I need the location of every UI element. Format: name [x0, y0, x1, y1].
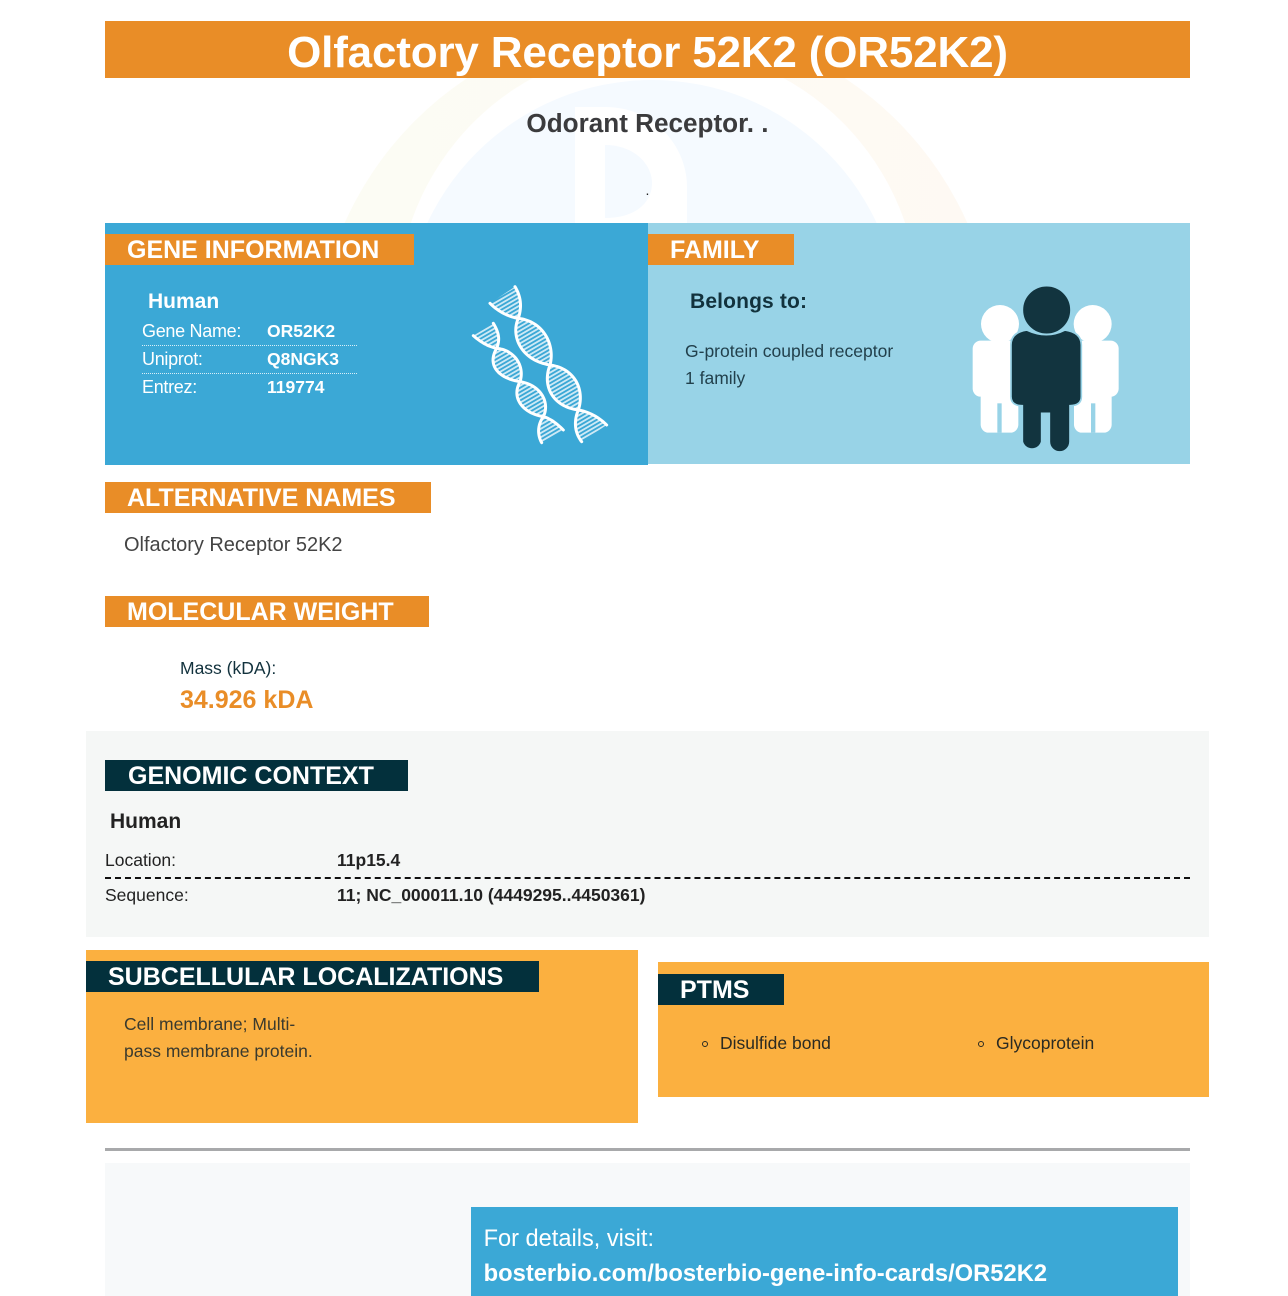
- heading: family: [648, 234, 794, 265]
- localization text: [124, 1014, 313, 1061]
- title banner: [105, 21, 1190, 78]
- callout: details link: [471, 1207, 1178, 1296]
- sequence row: Sequence:: [105, 885, 189, 905]
- heading: molecular weight: MOLECULAR WEIGHT: [127, 598, 394, 626]
- species label: Human: [110, 810, 181, 833]
- gene name row: Gene Name:: [142, 321, 241, 341]
- panel: footer: [105, 1163, 1190, 1296]
- entrez row: Entrez:: [142, 376, 197, 396]
- title banner: Olfactory Receptor 52K2 (OR52K2): [287, 28, 1008, 77]
- panel: genomic context: [86, 731, 1209, 937]
- icon: group of people: [972, 286, 1119, 452]
- PTM item: disulfide bond: Disulfide bond: [720, 1033, 831, 1053]
- heading: subcellular localizations: SUBCELLULAR LOCALIZATIONS: [108, 963, 503, 991]
- panel: PTMs: [658, 962, 1209, 1097]
- uniprot row: [142, 346, 357, 374]
- gene name row: [142, 318, 357, 346]
- heading: PTMs: PTMS: [680, 976, 749, 1004]
- panel: subcellular localizations: [86, 950, 638, 1123]
- heading: family: FAMILY: [670, 236, 759, 264]
- heading: genomic context: GENOMIC CONTEXT: [128, 762, 374, 790]
- family description: 1 family: [685, 368, 745, 388]
- localization text: pass membrane protein.: [124, 1041, 313, 1061]
- location row: 11p15.4: [337, 850, 400, 870]
- callout URL: bosterbio.com/bosterbio-gene-info-cards/OR52K2: [484, 1260, 1047, 1287]
- panel: gene information: [105, 223, 648, 465]
- localization text: Cell membrane; Multi-: [124, 1014, 295, 1034]
- heading: gene information: GENE INFORMATION: [127, 236, 379, 264]
- mass label: Mass (kDA):: [180, 658, 276, 678]
- sequence row: 11; NC_000011.10 (4449295..4450361): [337, 885, 645, 905]
- callout label: For details, visit:: [484, 1226, 654, 1252]
- background watermark logo: [345, 78, 967, 223]
- section: molecular weight: [105, 596, 429, 714]
- species label: Human: [148, 290, 219, 313]
- icon: DNA helices: [472, 285, 608, 444]
- section: alternative names: [105, 482, 431, 556]
- entrez row: [142, 376, 324, 396]
- subtitle: Odorant Receptor. .: [526, 108, 769, 138]
- small dot text: .: [646, 182, 649, 198]
- belongs to label: Belongs to:: [690, 290, 807, 313]
- entrez row: 119774: [267, 376, 324, 396]
- heading: alternative names: ALTERNATIVE NAMES: [127, 484, 396, 512]
- PTM item: glycoprotein: Glycoprotein: [996, 1033, 1094, 1053]
- mass value: 34.926 kDA: [180, 686, 313, 714]
- alternative name text: Olfactory Receptor 52K2: [124, 534, 343, 556]
- uniprot row: Uniprot:: [142, 349, 203, 369]
- sequence row: [105, 885, 645, 905]
- uniprot row: Q8NGK3: [267, 349, 339, 369]
- panel: family: [648, 223, 1190, 464]
- gene name row: OR52K2: [267, 321, 335, 341]
- heading: PTMs: [658, 974, 784, 1005]
- gene details table: [142, 321, 357, 396]
- location row: Location:: [105, 850, 176, 870]
- family description: [685, 341, 893, 388]
- location row: [105, 849, 1190, 879]
- family description: G-protein coupled receptor: [685, 341, 893, 361]
